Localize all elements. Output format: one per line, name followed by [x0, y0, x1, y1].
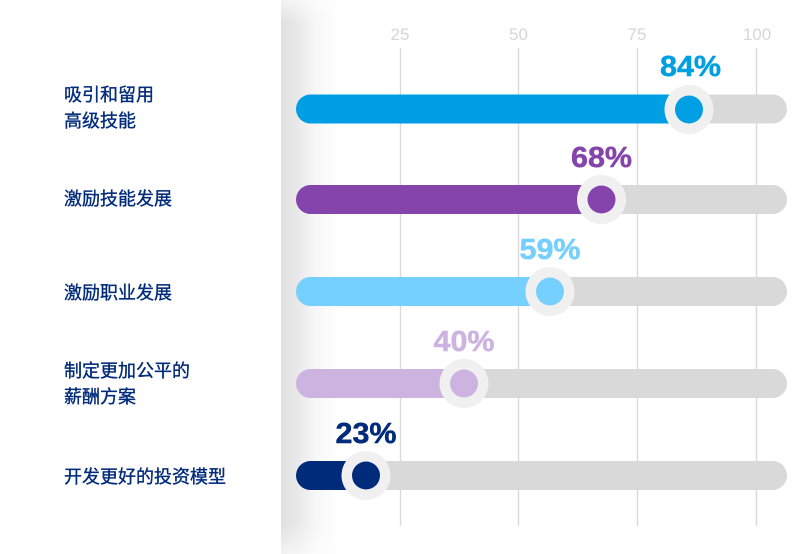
row: 开发更好的投资模型 23%: [64, 418, 787, 500]
axis labels and grid lines: 25: [391, 25, 409, 44]
bar track: [296, 461, 787, 490]
knob: [664, 85, 714, 134]
bar track: [296, 277, 787, 306]
knob: [526, 267, 574, 316]
axis labels and grid lines: 75: [628, 25, 646, 44]
bar fill: [296, 94, 689, 124]
category label: 激励职业发展: [64, 283, 172, 303]
row: 激励职业发展 59%: [64, 234, 787, 316]
knob: [440, 359, 488, 408]
category label: 吸引和留用: [64, 85, 154, 105]
value: 23%: [336, 418, 397, 450]
category label: 制定更加公平的: [64, 361, 190, 381]
bar fill: [296, 185, 601, 214]
knob: [342, 451, 390, 500]
category label: 开发更好的投资模型: [64, 467, 226, 487]
axis labels and grid lines: 50: [509, 25, 528, 44]
row: 吸引和留用高级技能 84%: [64, 51, 787, 134]
bar track: [296, 94, 787, 124]
value: 84%: [660, 51, 721, 83]
bar fill: [296, 277, 550, 306]
bar fill: [296, 461, 366, 490]
category label: 薪酬方案: [64, 387, 136, 407]
value: 68%: [571, 142, 632, 174]
row: 激励技能发展 68%: [64, 142, 787, 224]
knob: [577, 175, 626, 224]
value: 40%: [434, 326, 495, 358]
axis labels and grid lines: 100: [743, 25, 771, 44]
value: 59%: [520, 234, 581, 266]
row: 制定更加公平的薪酬方案 40%: [64, 326, 787, 408]
category label: 激励技能发展: [64, 189, 172, 209]
bar track: [296, 185, 787, 214]
shadow band behind chart: [281, 0, 339, 554]
axis labels and grid lines: [391, 25, 771, 526]
bar fill: [296, 369, 464, 398]
bar track: [296, 369, 787, 398]
category label: 高级技能: [64, 111, 136, 131]
